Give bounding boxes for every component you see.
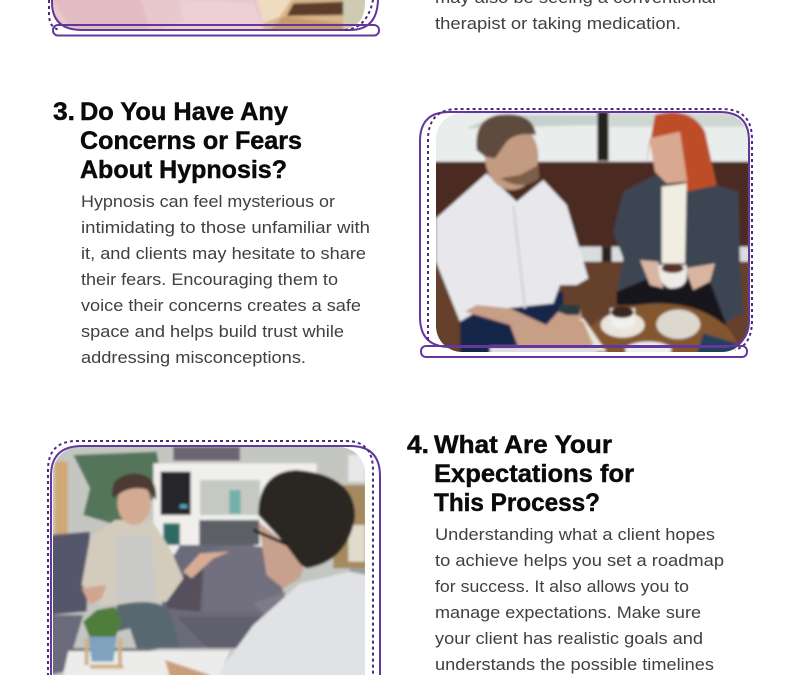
- heading: section 4: Expectations for: [434, 460, 634, 488]
- table and plant: [60, 651, 230, 675]
- body text: section 3: voice their concerns creates a safe: [81, 296, 361, 315]
- pill bar: [421, 346, 747, 357]
- photo: man and woman talking over coffee: [436, 113, 748, 352]
- heading: section 3: About Hypnosis?: [80, 156, 287, 184]
- photo frame: section 4: [48, 441, 380, 675]
- body text: section 3: it, and clients may hesitate to share: [81, 244, 366, 263]
- woman: [613, 173, 743, 325]
- body text: section 4: manage expectations. Make sure: [435, 603, 701, 622]
- man: [436, 173, 588, 322]
- heading: section 3: 3.: [53, 98, 75, 126]
- body text: section 3: addressing misconceptions.: [81, 348, 306, 367]
- body text: end of section 2: therapist or taking medication.: [435, 14, 681, 33]
- body text: section 3: their fears. Encouraging them to: [81, 270, 338, 289]
- heading: section 3: Do You Have Any: [80, 98, 288, 126]
- man: [258, 470, 355, 568]
- dashed frame: [48, 441, 373, 675]
- body text: section 3: Hypnosis can feel mysterious or: [81, 192, 335, 211]
- table: [590, 301, 737, 352]
- body text: section 3: [81, 192, 370, 367]
- dashed frame: [428, 109, 752, 350]
- solid frame: [52, 0, 378, 30]
- dashed frame: [49, 0, 375, 30]
- solid frame: [420, 112, 749, 347]
- photo frame: section 3: [419, 108, 753, 358]
- body text: section 4: understands the possible timelines: [435, 655, 714, 674]
- heading: section 4: 4.: [407, 431, 429, 459]
- body text: section 4: Understanding what a client hopes: [435, 525, 715, 544]
- heading: section 4: This Process?: [434, 489, 600, 517]
- body text: section 4: your client has realistic goals and: [435, 629, 703, 648]
- heading: section 4: What Are Your: [434, 431, 612, 459]
- photo: therapist with client on sofa: [50, 445, 367, 675]
- body text: section 3: space and helps build trust while: [81, 322, 344, 341]
- body text: end of section 2: [435, 0, 716, 33]
- body text: section 3: intimidating to those unfamiliar with: [81, 218, 370, 237]
- woman: [82, 520, 183, 605]
- heading: section 3: Concerns or Fears: [80, 127, 302, 155]
- body text: section 4: to achieve helps you set a roadmap: [435, 551, 724, 570]
- pill bar: [53, 25, 379, 36]
- heading: section 3: [53, 98, 302, 184]
- sofa: [50, 532, 90, 615]
- heading: section 4: [407, 431, 634, 517]
- solid frame: [51, 446, 380, 675]
- photo: pink blanket and book: [53, 0, 365, 29]
- body text: section 4: for success. It also allows you to: [435, 577, 689, 596]
- photo frame: top cropped image: [49, 0, 379, 36]
- body text: section 4: [435, 525, 724, 674]
